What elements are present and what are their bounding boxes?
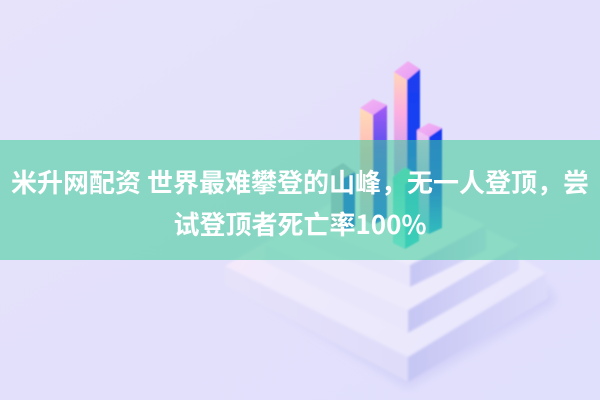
column: front right <box>417 123 442 234</box>
platform: bottom tier <box>225 175 548 382</box>
title band <box>0 140 600 260</box>
platform shadow <box>235 282 556 388</box>
column: grey <box>331 163 355 232</box>
column: teal <box>393 167 419 249</box>
column: tall <box>394 61 420 232</box>
bar chart columns <box>331 61 442 249</box>
title: 米升网配资 世界最难攀登的山峰，无一人登顶，尝 <box>11 163 589 200</box>
platform: middle tier <box>265 175 519 333</box>
title: 试登顶者死亡率100% <box>173 205 427 242</box>
stepped platform <box>225 175 548 382</box>
column: pink short <box>360 99 387 225</box>
platform: top tier <box>300 180 486 287</box>
title <box>11 163 589 242</box>
